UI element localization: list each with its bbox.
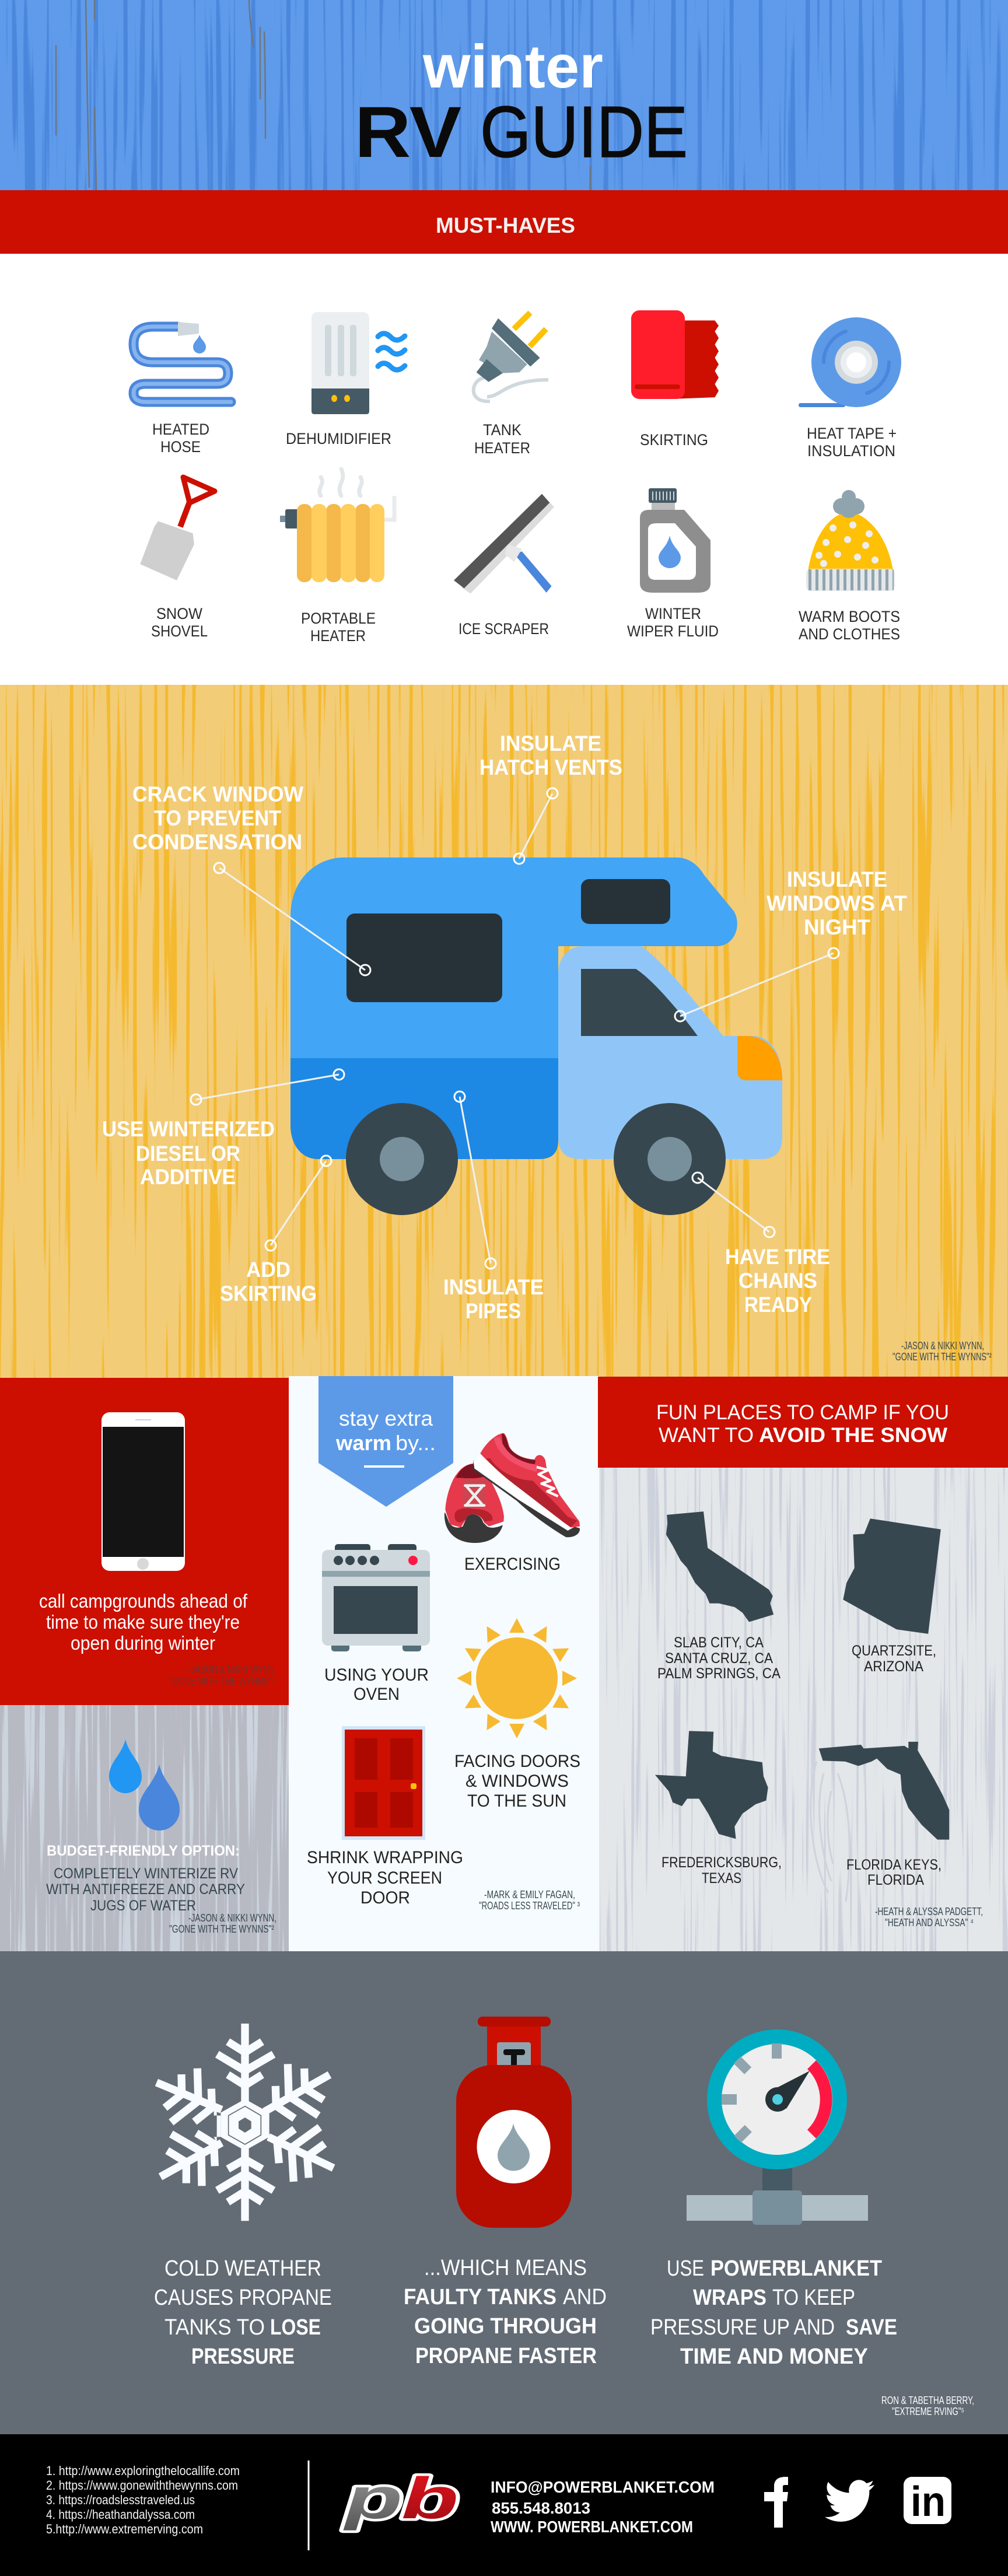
- callout: winterized diesel: [102, 1069, 344, 1189]
- title: RV: [355, 92, 461, 173]
- text: call ahead: [39, 1590, 248, 1654]
- text: use powerblanket: WRAPS: [693, 2286, 766, 2310]
- icon: heat tape: [799, 317, 901, 407]
- callout: insulate pipes: PIPES: [466, 1298, 521, 1323]
- label: exercising: EXERCISING: [464, 1555, 561, 1574]
- references list: 1. http://www.exploringthelocallife.com: [46, 2463, 240, 2478]
- text: cold weather: LOSE: [270, 2315, 321, 2340]
- callout: crack window: TO PREVENT: [154, 806, 281, 830]
- label: tank heater: TANK: [483, 421, 522, 439]
- label: snow shovel: SNOW: [156, 605, 202, 622]
- icon: ice scraper: [454, 494, 554, 594]
- callout: crack window: CRACK WINDOW: [132, 782, 304, 806]
- panel: stay extra warm: [289, 1376, 599, 1952]
- header banner: [0, 0, 1008, 190]
- callout: tire chains: READY: [744, 1292, 812, 1317]
- label: ice scraper: ICE SCRAPER: [459, 620, 549, 638]
- label: using your oven: USING YOUR: [324, 1665, 429, 1685]
- label: facing doors and windows: & WINDOWS: [466, 1772, 569, 1791]
- logo: powerblanket pb: p: [342, 2466, 402, 2531]
- panel: budget-friendly option: [0, 1705, 289, 1952]
- heading: fun places: [598, 1377, 1008, 1468]
- label: dehumidifier: DEHUMIDIFIER: [286, 430, 391, 447]
- text: winterize: WITH ANTIFREEZE AND CARRY: [46, 1881, 245, 1898]
- credit: Fagan: [479, 1889, 580, 1912]
- icon: sun: [457, 1618, 577, 1738]
- icon: linkedin: in: [911, 2479, 946, 2525]
- heading: fun places: FUN PLACES TO CAMP IF YOU: [656, 1401, 949, 1424]
- title: [355, 33, 688, 173]
- heading: fun places: WANT TO: [659, 1424, 754, 1447]
- label: portable heater: HEATER: [310, 627, 366, 645]
- text: which means: FAULTY TANKS: [404, 2285, 556, 2309]
- icon: dehumidifier: [312, 312, 405, 414]
- text: which means: AND: [563, 2285, 607, 2309]
- callout: insulate hatch vents: HATCH VENTS: [480, 755, 622, 779]
- label: shrink wrapping: DOOR: [360, 1888, 410, 1908]
- icon: oven: [322, 1544, 430, 1651]
- icon: portable heater: [280, 469, 394, 582]
- callout: crack window: CONDENSATION: [132, 830, 302, 854]
- label: shrink wrapping: [307, 1848, 463, 1908]
- text: budget option heading: BUDGET-FRIENDLY OPTION:: [47, 1843, 240, 1859]
- label: shrink wrapping: YOUR SCREEN: [327, 1868, 442, 1888]
- callout: insulate windows at night: WINDOWS AT: [766, 891, 907, 915]
- credit: Padgett: "HEATH AND ALYSSA" ⁴: [885, 1917, 974, 1929]
- label: warm boots and clothes: AND CLOTHES: [799, 625, 900, 643]
- label: quartzsite: QUARTZSITE,: [852, 1643, 936, 1659]
- text: call ahead: call campgrounds ahead of: [39, 1590, 248, 1612]
- label: heat tape + insulation: HEAT TAPE +: [807, 425, 897, 442]
- label: tank heater: [474, 421, 530, 457]
- icon: snowflake: [156, 2024, 334, 2221]
- references list: 5.http://www.extremerving.com: [46, 2522, 203, 2536]
- text: winterize: COMPLETELY WINTERIZE RV: [54, 1866, 238, 1882]
- icon: water drops: [109, 1740, 180, 1831]
- label: fredericksburg: TEXAS: [702, 1870, 741, 1887]
- label: winter wiper fluid: WIPER FLUID: [627, 622, 719, 640]
- icon: tank heater plug: [474, 313, 548, 401]
- label: skirting: SKIRTING: [640, 431, 708, 449]
- callout: insulate hatch vents: [480, 731, 622, 864]
- text: winterize: [46, 1866, 245, 1914]
- text: which means: PROPANE FASTER: [415, 2344, 597, 2368]
- text: which means: ...WHICH MEANS: [424, 2256, 587, 2280]
- label: florida keys: FLORIDA KEYS,: [846, 1857, 942, 1873]
- text: cold weather: COLD WEATHER: [164, 2256, 321, 2281]
- callout: insulate windows at night: INSULATE: [787, 867, 887, 891]
- footer: [0, 2434, 1008, 2576]
- label: facing doors and windows: TO THE SUN: [467, 1791, 566, 1811]
- contact details: INFO@POWERBLANKET.COM: [491, 2478, 715, 2496]
- text: use powerblanket: PRESSURE UP AND: [650, 2315, 835, 2340]
- label: quartzsite: [852, 1643, 936, 1675]
- contact details: [491, 2478, 715, 2536]
- label: california places: SANTA CRUZ, CA: [665, 1650, 773, 1667]
- credit: Padgett: [875, 1906, 983, 1929]
- label: warm boots and clothes: WARM BOOTS: [799, 608, 900, 625]
- text: use powerblanket: TIME AND MONEY: [680, 2344, 868, 2369]
- label: fredericksburg: [662, 1854, 782, 1887]
- icon: running shoes: [444, 1433, 580, 1543]
- map: California: [666, 1511, 774, 1622]
- label: california places: SLAB CITY, CA: [674, 1634, 764, 1651]
- icon: snow shovel: [140, 477, 215, 580]
- credit: Wynn: -JASON & NIKKI WYNN,: [188, 1664, 276, 1675]
- contact details: 855.548.8013: [492, 2499, 590, 2517]
- callout: winterized diesel: DIESEL OR: [136, 1141, 240, 1166]
- icon: twitter: [825, 2480, 874, 2522]
- panel: fun places to camp: [598, 1377, 1008, 1952]
- text: cold weather: TANKS TO: [164, 2315, 265, 2340]
- panel: RV diagram: [0, 685, 1008, 1378]
- label: winter wiper fluid: [627, 605, 719, 640]
- callout: tire chains: HAVE TIRE: [725, 1244, 830, 1269]
- references list: 3. https://roadslesstraveled.us: [46, 2493, 195, 2507]
- label: california places: [657, 1634, 780, 1682]
- label: shrink wrapping: SHRINK WRAPPING: [307, 1848, 463, 1867]
- icon: pressure gauge: [687, 2029, 868, 2225]
- text: use powerblanket: USE: [667, 2256, 704, 2281]
- icon: propane tank: [456, 2017, 572, 2228]
- heading: fun places: AVOID THE SNOW: [759, 1424, 947, 1447]
- label: facing doors and windows: FACING DOORS: [454, 1752, 580, 1771]
- map: Florida: [819, 1742, 949, 1840]
- label: heat tape + insulation: INSULATION: [807, 442, 895, 460]
- callout: add skirting: [220, 1156, 331, 1306]
- icon: phone: [102, 1412, 185, 1571]
- label: heated hose: [152, 421, 209, 456]
- text: which means: GOING THROUGH: [414, 2314, 597, 2339]
- credit: Wynn: [169, 1912, 276, 1935]
- title: winter: [422, 33, 603, 101]
- label: snow shovel: SHOVEL: [151, 622, 208, 640]
- text: use powerblanket: SAVE: [846, 2315, 897, 2340]
- contact details: WWW. POWERBLANKET.COM: [491, 2518, 693, 2536]
- icon: winter hat: [806, 490, 895, 591]
- label: heated hose: HOSE: [160, 438, 201, 456]
- callout: add skirting: SKIRTING: [220, 1281, 317, 1306]
- label: snow shovel: [151, 605, 208, 640]
- text: use powerblanket: POWERBLANKET: [710, 2256, 882, 2281]
- callout: insulate pipes: [443, 1091, 544, 1323]
- callout: insulate pipes: INSULATE: [443, 1275, 544, 1299]
- label: fredericksburg: FREDERICKSBURG,: [662, 1854, 782, 1871]
- callout: insulate hatch vents: INSULATE: [500, 731, 601, 755]
- title: GUIDE: [480, 92, 688, 173]
- label: portable heater: [301, 610, 376, 645]
- credit: Wynn: "GONE WITH THE WYNNS"²: [169, 1675, 274, 1687]
- callout: insulate windows at night: NIGHT: [804, 915, 870, 939]
- label: using your oven: OVEN: [354, 1685, 400, 1704]
- callout: tire chains: [692, 1172, 830, 1317]
- credit: Wynn: -JASON & NIKKI WYNN,: [188, 1912, 276, 1924]
- text: cold weather: CAUSES PROPANE: [154, 2286, 332, 2310]
- credit: Fagan: "ROADS LESS TRAVELED" ³: [479, 1900, 580, 1912]
- label: using your oven: [324, 1665, 429, 1704]
- label: portable heater: PORTABLE: [301, 610, 376, 627]
- callout: winterized diesel: USE WINTERIZED: [102, 1116, 275, 1141]
- callout: add skirting: ADD: [246, 1257, 290, 1282]
- logo: powerblanket pb: b: [401, 2466, 459, 2531]
- callout: crack window: [132, 782, 370, 975]
- must-haves heading bar: MUST-HAVES: [436, 214, 575, 237]
- references list: 4. https://heathandalyssa.com: [46, 2507, 195, 2522]
- text: use powerblanket: [650, 2256, 897, 2369]
- icon: facebook: [764, 2477, 788, 2528]
- text: cold weather: PRESSURE: [191, 2344, 295, 2369]
- icon: heated hose: [134, 322, 231, 402]
- icon: red door: [342, 1726, 425, 1840]
- panel: propane: [0, 1951, 1008, 2434]
- credit: Berry: RON & TABETHA BERRY,: [881, 2395, 974, 2406]
- icon: skirting: [631, 310, 719, 399]
- text: which means: [404, 2256, 607, 2368]
- panel: call campgrounds: [0, 1378, 289, 1705]
- label: tank heater: HEATER: [474, 439, 530, 457]
- callout: winterized diesel: ADDITIVE: [140, 1164, 236, 1189]
- callout: insulate windows at night: [675, 867, 907, 1021]
- label: california places: PALM SPRINGS, CA: [657, 1665, 780, 1682]
- banner: stay extra warm by: warm: [335, 1431, 391, 1455]
- references list: 2. https://www.gonewiththewynns.com: [46, 2478, 238, 2493]
- banner: stay extra warm by: stay extra: [339, 1406, 433, 1430]
- credit: Wynn: "GONE WITH THE WYNNS"²: [169, 1923, 274, 1935]
- map: Texas: [655, 1731, 768, 1839]
- callout: tire chains: CHAINS: [738, 1268, 817, 1293]
- label: florida keys: FLORIDA: [867, 1872, 924, 1888]
- icon: wiper fluid bottle: [640, 488, 710, 593]
- logo: powerblanket pb: [342, 2466, 459, 2531]
- references list: [46, 2463, 240, 2536]
- text: use powerblanket: TO KEEP: [772, 2286, 855, 2310]
- label: facing doors and windows: [454, 1752, 580, 1811]
- label: warm boots and clothes: [799, 608, 900, 643]
- label: heated hose: HEATED: [152, 421, 209, 438]
- text: call ahead: time to make sure they're: [46, 1611, 240, 1633]
- text: cold weather: [154, 2256, 332, 2369]
- credit: Berry: "EXTREME RVING"⁵: [892, 2406, 964, 2417]
- credit: Berry: [881, 2395, 974, 2417]
- label: quartzsite: ARIZONA: [864, 1658, 923, 1675]
- credit: Wynn: [892, 1340, 992, 1363]
- text: winterize: JUGS OF WATER: [90, 1898, 196, 1914]
- map: Arizona: [843, 1518, 941, 1634]
- credit: Wynn: [169, 1664, 276, 1687]
- banner: stay extra warm by: by...: [396, 1431, 436, 1455]
- panel: must-haves items: [0, 254, 1008, 685]
- text: call ahead: open during winter: [71, 1632, 215, 1654]
- banner: stay extra warm by: [318, 1376, 453, 1507]
- must-haves heading bar: [0, 190, 1008, 254]
- illustration: RV: [290, 858, 782, 1215]
- label: florida keys: [846, 1857, 942, 1888]
- credit: Fagan: -MARK & EMILY FAGAN,: [484, 1889, 575, 1901]
- label: heat tape + insulation: [807, 425, 897, 460]
- label: winter wiper fluid: WINTER: [645, 605, 701, 622]
